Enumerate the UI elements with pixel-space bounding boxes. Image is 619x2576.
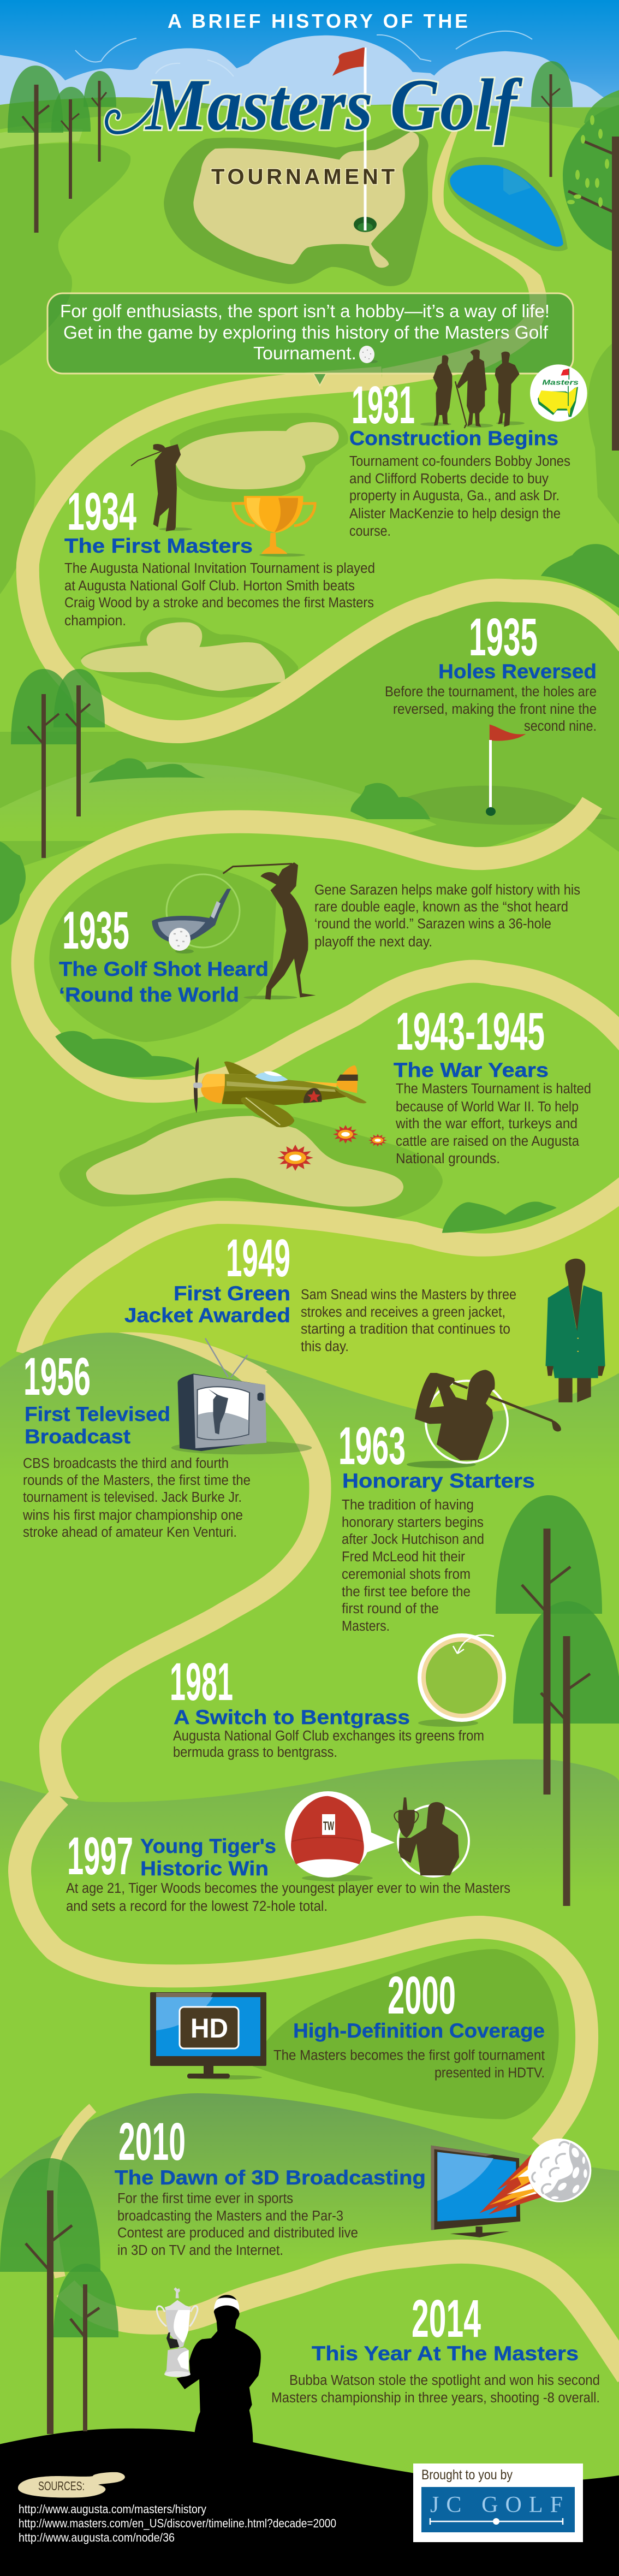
- flag mound: [393, 786, 619, 825]
- body text: [22, 1456, 251, 1540]
- heading: Young Tiger's: [140, 1835, 276, 1857]
- body text: [271, 2373, 600, 2406]
- year: 2000: [388, 1965, 456, 2025]
- icon: man in green jacket: [545, 1259, 605, 1402]
- year: 1934: [67, 482, 136, 541]
- trees: top left: [8, 66, 116, 233]
- cart path: lower section: [20, 1797, 587, 2146]
- heading: Historic Win: [140, 1857, 269, 1880]
- body text: the first tee before the: [342, 1584, 471, 1600]
- body text: For the first time ever in sports: [117, 2191, 293, 2206]
- body text: [349, 454, 570, 539]
- body text: reversed, making the front nine the: [393, 702, 597, 717]
- year: 1997: [67, 1826, 133, 1886]
- body text: cattle are raised on the Augusta: [396, 1134, 580, 1149]
- heading: First Televised: [25, 1403, 170, 1425]
- dark green circle behind 1935: [49, 864, 276, 1042]
- body text: in 3D on TV and the Internet.: [117, 2243, 283, 2258]
- event: 1934 the first masters: [64, 444, 375, 629]
- callout: intro: For golf enthusiasts, the sport isn’t a hobby—it’s a way of life!: [60, 301, 550, 321]
- body text: champion.: [64, 613, 126, 629]
- body text: course.: [349, 524, 391, 539]
- background: darker fairway patches: [0, 339, 619, 874]
- body text: Fred McLeod hit their: [342, 1549, 465, 1565]
- heading: [140, 1835, 276, 1880]
- sources badge: [18, 2472, 125, 2498]
- source links: http://www.augusta.com/node/36: [19, 2531, 175, 2544]
- body text: after Jock Hutchison and: [342, 1532, 484, 1547]
- body text: [301, 1287, 516, 1354]
- body text: wins his first major championship one: [22, 1508, 243, 1523]
- body text: [314, 883, 580, 950]
- body text: property in Augusta, Ga., and ask Dr.: [349, 488, 560, 504]
- body text: Sam Snead wins the Masters by three: [301, 1287, 516, 1302]
- year: 1935: [469, 607, 538, 667]
- icon: HD television: HD: [191, 2013, 228, 2044]
- event: 2010 dawn of 3D broadcasting: [115, 2112, 591, 2258]
- year: 1935: [62, 901, 129, 960]
- event: 1949 first green jacket: [124, 1228, 605, 1402]
- heading: The Golf Shot Heard: [59, 958, 269, 980]
- heading: Holes Reversed: [438, 660, 597, 683]
- event: 2000 high-definition coverage: [150, 1965, 545, 2081]
- heading: ‘Round the World: [59, 984, 239, 1006]
- body text: [66, 1881, 510, 1914]
- icon: HD television: [150, 1992, 266, 2080]
- body text: [64, 561, 375, 629]
- icon: Masters logo badge: Masters: [542, 378, 579, 386]
- icon: golfer silhouette: [223, 862, 316, 1000]
- body text: because of World War II. To help: [396, 1099, 579, 1115]
- flag hole: [354, 217, 377, 232]
- pond: [448, 157, 568, 251]
- bottom black hill: [0, 2429, 619, 2576]
- source links: http://www.augusta.com/masters/history: [19, 2502, 206, 2516]
- icon: Tiger silhouette with trophy: [394, 1797, 469, 1876]
- icon: vintage television: [171, 1339, 312, 1454]
- icon: champion silhouette with trophy: [157, 2287, 261, 2445]
- event: 1935 holes reversed: [385, 607, 597, 734]
- body text: honorary starters begins: [342, 1515, 484, 1530]
- birds in the sky: [75, 31, 532, 76]
- body text: The tradition of having: [342, 1497, 474, 1513]
- trees: left of 2010: [0, 2158, 118, 2434]
- body text: Masters.: [342, 1619, 390, 1634]
- body text: starting a tradition that continues to: [301, 1322, 510, 1337]
- heading: This Year At The Masters: [312, 2342, 579, 2365]
- event: 2014 this year at the masters: [157, 2287, 600, 2445]
- body text: CBS broadcasts the third and fourth: [23, 1456, 229, 1471]
- icon: red cap in speech bubble: TW: [323, 1819, 334, 1833]
- body text: The Augusta National Invitation Tournament is played: [64, 561, 375, 576]
- sources badge: SOURCES:: [38, 2479, 85, 2493]
- cart path: middle section: [50, 1333, 320, 1805]
- source links: [19, 2502, 336, 2544]
- logo: JC Golf: [421, 2487, 575, 2532]
- body text: second nine.: [524, 719, 597, 734]
- flame: [479, 2154, 541, 2214]
- heading: Honorary Starters: [342, 1470, 535, 1492]
- body text: broadcasting the Masters and the Par-3: [117, 2208, 343, 2224]
- body text: rounds of the Masters, the first time the: [23, 1473, 251, 1488]
- body text: Bubba Watson stole the spotlight and won his second: [289, 2373, 600, 2388]
- year: 1963: [338, 1416, 406, 1476]
- cart path: final section: [52, 2108, 619, 2376]
- heading: First Green: [174, 1282, 290, 1305]
- year: 1981: [170, 1652, 233, 1712]
- heading: Broadcast: [25, 1425, 130, 1448]
- icon: red flag on pin: [486, 725, 526, 816]
- body text: ‘round the world.” Sarazen wins a 36-hole: [314, 916, 551, 932]
- event: 1931 construction begins: [349, 350, 587, 539]
- background: distant hills: [0, 97, 619, 382]
- fairway hill: [0, 762, 437, 841]
- year: 1931: [352, 375, 415, 435]
- event: 1981 switch to bentgrass: [170, 1633, 506, 1760]
- body text: [173, 1728, 484, 1760]
- body text: At age 21, Tiger Woods becomes the youngest player ever to win the Masters: [66, 1881, 510, 1896]
- body text: National grounds.: [396, 1151, 500, 1166]
- bunker 1: [170, 413, 348, 502]
- panel: brought to you by: Brought to you by: [421, 2467, 513, 2483]
- event: 1935 golf shot heard round the world: [59, 862, 580, 1006]
- year: 2010: [118, 2112, 186, 2171]
- body text: The Masters becomes the first golf tournament: [273, 2048, 545, 2063]
- body text: Before the tournament, the holes are: [385, 684, 597, 700]
- cart path: upper section: [22, 127, 619, 1354]
- body text: [395, 1081, 591, 1166]
- trees: left of 1935 bend: [11, 669, 105, 858]
- year: 2014: [412, 2289, 481, 2348]
- heading: High-Definition Coverage: [293, 2020, 545, 2042]
- callout: intro: Tournament.: [253, 343, 356, 363]
- event: 1963 honorary starters: [338, 1370, 561, 1634]
- icon: flag and pole: [332, 48, 367, 230]
- body text: strokes and receives a green jacket,: [301, 1305, 505, 1320]
- heading: Construction Begins: [349, 427, 558, 449]
- bushes: [0, 544, 619, 1233]
- year: 1956: [23, 1347, 91, 1406]
- heading: tournament: TOURNAMENT: [211, 165, 395, 189]
- background: clouds: [0, 35, 619, 146]
- icon: driver and ball: [152, 874, 240, 954]
- body text: at Augusta National Golf Club. Horton Smith beats: [64, 578, 355, 594]
- event: 1943-1945 the war years: [193, 1002, 591, 1171]
- icon: explosions: [277, 1125, 387, 1171]
- callout: intro: [47, 293, 573, 386]
- icon: 3D television with flaming golf ball: [431, 2139, 591, 2237]
- body text: stroke ahead of amateur Ken Venturi.: [23, 1525, 237, 1540]
- bunker 2: [81, 618, 298, 698]
- body text: ceremonial shots from: [342, 1567, 471, 1582]
- icon: Masters logo badge: [530, 364, 587, 422]
- icon: red cap in speech bubble: [285, 1791, 395, 1881]
- body text: [342, 1497, 484, 1634]
- panel: brought to you by: [413, 2464, 583, 2542]
- bunker 3: [59, 1108, 443, 1222]
- panel: sources: [18, 2472, 336, 2544]
- tree: top right large: [563, 90, 619, 451]
- heading: The Dawn of 3D Broadcasting: [115, 2166, 426, 2189]
- hill: 1956 to 1963: [0, 1333, 619, 1535]
- body text: [385, 684, 597, 734]
- event: 1997 young tiger's historic win: [66, 1791, 510, 1914]
- heading: [124, 1282, 290, 1327]
- hill: 1997: [0, 1759, 619, 1944]
- body text: Tournament co-founders Bobby Jones: [349, 454, 570, 469]
- tree: top right small: [531, 61, 573, 177]
- body text: Contest are produced and distributed live: [117, 2225, 358, 2241]
- icon: three founders: [420, 350, 525, 428]
- lime fairway: [0, 1185, 619, 1474]
- golf ball: [528, 2139, 591, 2202]
- logo title: Masters Golf: Masters Golf: [145, 64, 523, 146]
- body text: [117, 2191, 358, 2258]
- body text: playoff the next day.: [314, 934, 432, 950]
- body text: [273, 2048, 545, 2081]
- body text: with the war effort, turkeys and: [395, 1116, 578, 1132]
- icon: gold trophy: [233, 496, 315, 556]
- icon: fighter plane: [193, 1057, 367, 1127]
- body text: presented in HDTV.: [435, 2065, 545, 2081]
- source links: http://www.masters.com/en_US/discover/timeline.html?decade=2000: [19, 2516, 336, 2530]
- heading: Jacket Awarded: [124, 1304, 290, 1327]
- icon: golfer in white ring: [407, 1370, 561, 1468]
- body text: and sets a record for the lowest 72-hole total.: [66, 1899, 328, 1914]
- dark patch behind 2000: [253, 1949, 559, 2119]
- icon: golfer silhouette: [131, 444, 192, 531]
- background: sky: [0, 0, 619, 142]
- body text: Craig Wood by a stroke and becomes the first Masters: [64, 595, 374, 611]
- logo: JC Golf: JC GOLF: [430, 2492, 563, 2518]
- US-shaped green: [164, 129, 428, 286]
- heading: A Switch to Bentgrass: [174, 1706, 410, 1728]
- heading: a brief history of the: A BRIEF HISTORY OF THE: [168, 10, 468, 32]
- body text: The Masters Tournament is halted: [396, 1081, 591, 1097]
- trees: right of Honorary Starters: [496, 1495, 619, 1906]
- body text: bermuda grass to bentgrass.: [173, 1745, 337, 1760]
- heading: The First Masters: [64, 535, 253, 557]
- icon: golf ball: [359, 346, 378, 363]
- body text: Gene Sarazen helps make golf history with his: [314, 883, 580, 898]
- icon: circular green patch: [418, 1633, 506, 1727]
- body text: this day.: [301, 1339, 349, 1354]
- body text: Masters championship in three years, shooting -8 overall.: [271, 2390, 600, 2406]
- body text: Augusta National Golf Club exchanges its greens from: [173, 1728, 484, 1744]
- header title group: [106, 10, 523, 230]
- body text: Alister MacKenzie to help design the: [349, 506, 561, 522]
- body text: tournament is televised. Jack Burke Jr.: [23, 1490, 242, 1505]
- body text: first round of the: [342, 1601, 439, 1616]
- heading: [25, 1403, 170, 1448]
- year: 1949: [226, 1228, 290, 1288]
- hill: 2010: [0, 2093, 619, 2294]
- event: 1956 first televised broadcast: [22, 1339, 312, 1540]
- body text: and Clifford Roberts decide to buy: [349, 471, 549, 487]
- heading: [59, 958, 269, 1006]
- heading: The War Years: [394, 1059, 549, 1081]
- callout: intro: Get in the game by exploring this history of the Masters Golf: [63, 322, 549, 342]
- body text: rare double eagle, known as the “shot heard: [314, 899, 568, 915]
